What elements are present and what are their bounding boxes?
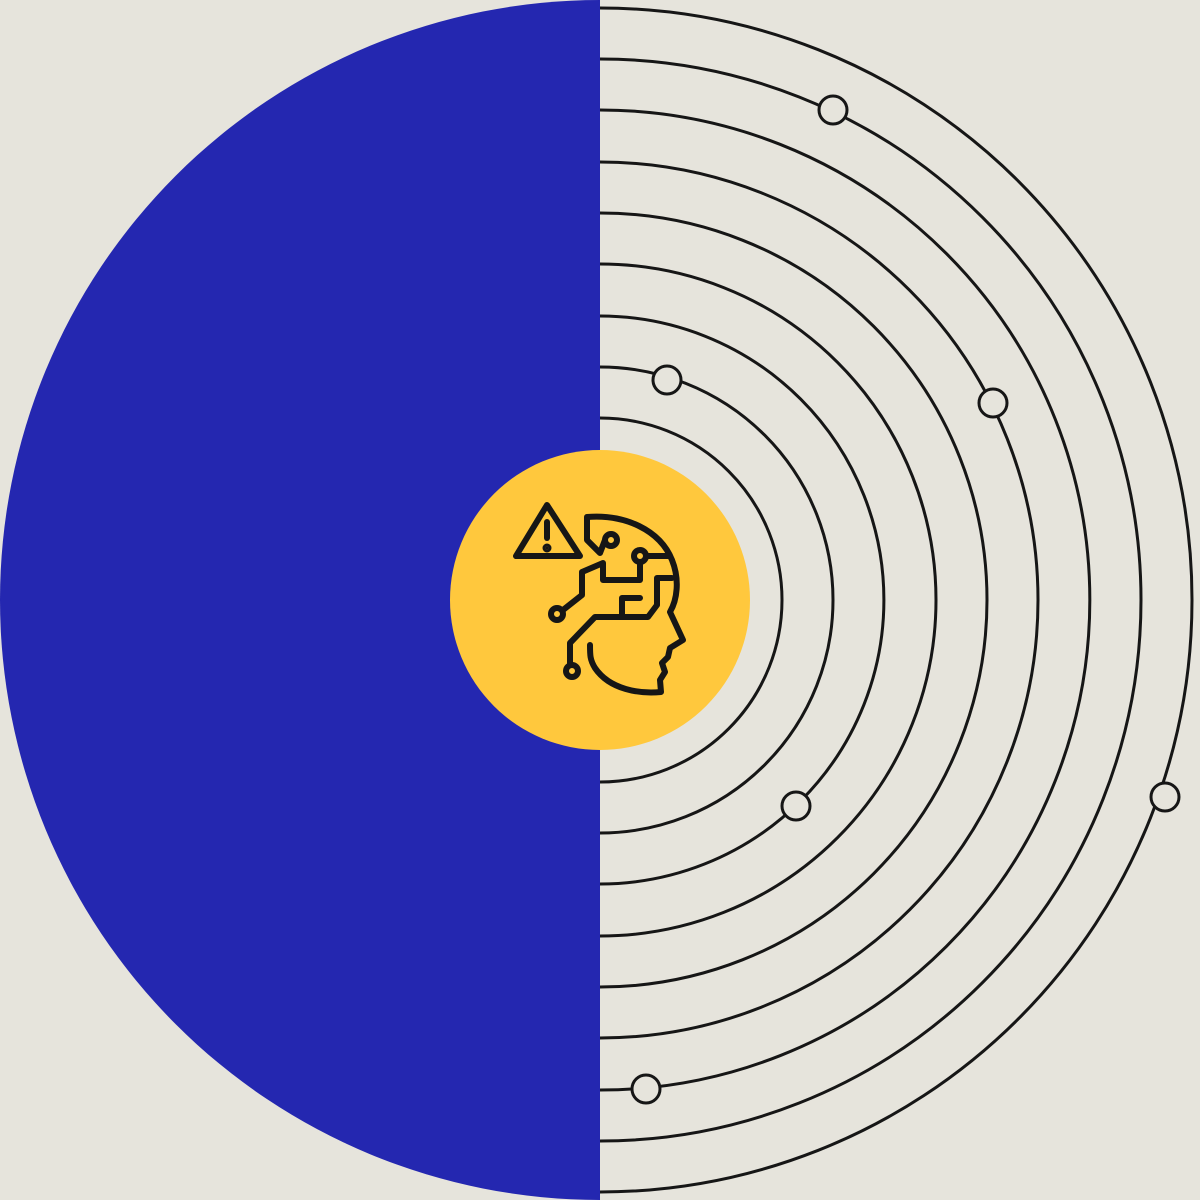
warning triangle [516, 505, 580, 556]
concentric arcs [600, 8, 1192, 1192]
circuits [605, 534, 617, 546]
head outline [587, 517, 683, 692]
blue half disc [0, 0, 600, 1200]
arc nodes [632, 96, 1179, 1103]
icon: AI head with warning [516, 505, 683, 692]
yellow center circle [450, 450, 750, 750]
